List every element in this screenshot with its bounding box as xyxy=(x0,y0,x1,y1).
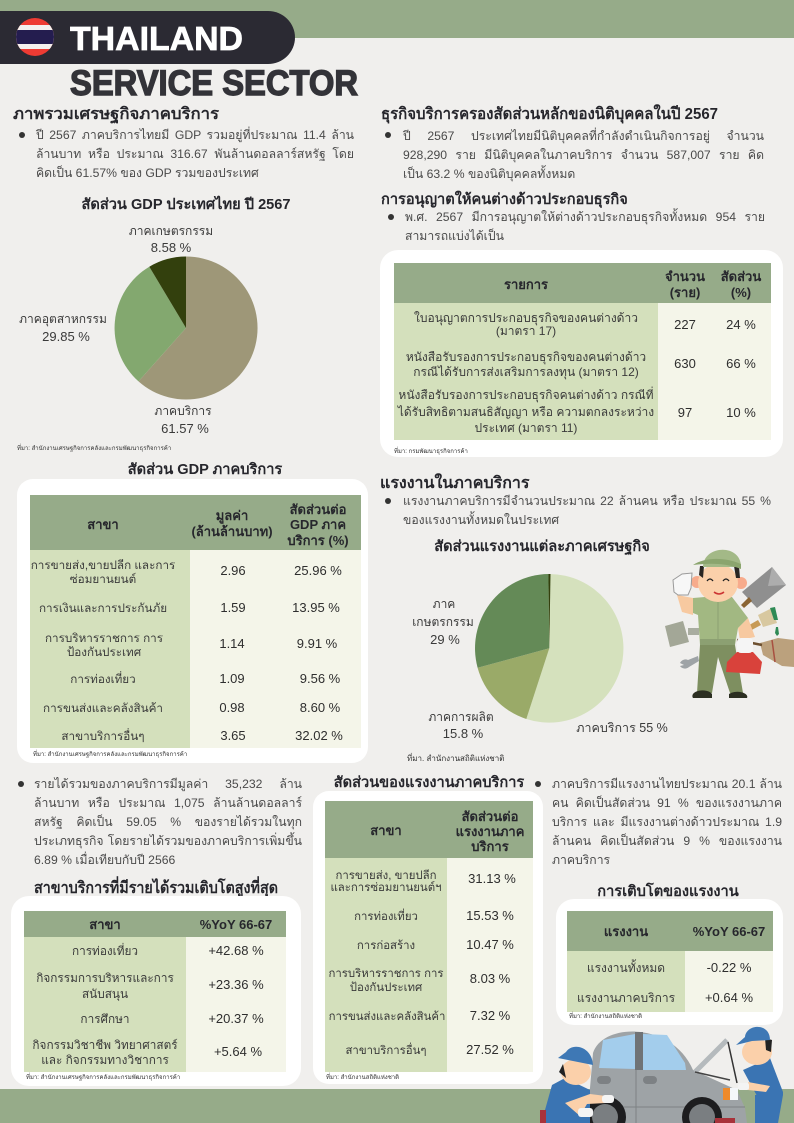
panel: labour share table: การขนส่งและคลังสินค้า xyxy=(329,1010,445,1023)
panel: revenue growth table: สาขา xyxy=(89,917,121,932)
panel: foreign business permits table: 66 % xyxy=(726,356,756,371)
title banner xyxy=(0,11,295,64)
panel: labour share table: สัดส่วนต่อ xyxy=(462,809,518,824)
panel: labour growth table: แรงงานภาคบริการ xyxy=(577,991,676,1005)
panel: GDP services table: 3.65 xyxy=(220,728,246,743)
panel: labour growth table: ที่มา: สำนักงานสถิติแห่งชาติ xyxy=(569,1012,642,1020)
panel: GDP services table: 1.09 xyxy=(219,671,245,686)
panel: revenue growth table: กิจกรรมวิชาชีพ วิทยาศาสตร์ xyxy=(32,1038,178,1052)
panel: revenue growth table: +42.68 % xyxy=(208,943,264,958)
text: labour composition paragraph: คน คิดเป็นสัดส่วน 91 % ของแรงงานภาค xyxy=(552,796,782,810)
panel: foreign business permits table: 97 xyxy=(678,405,692,420)
panel: labour share table: ที่มา: สำนักงานสถิติแห่งชาติ xyxy=(326,1073,399,1081)
panel: labour growth table: แรงงานทั้งหมด xyxy=(587,959,665,975)
panel: revenue growth table: การศึกษา xyxy=(80,1012,130,1026)
source: GDP pie: ที่มา: สำนักงานเศรษฐกิจการคลังและกรมพัฒนาธุรกิจการค้า xyxy=(17,444,171,452)
heading: revenue growth: สาขาบริการที่มีรายได้รวมเติบโตสูงที่สุด xyxy=(34,876,278,899)
panel: revenue growth table: กิจกรรมการบริหารและการ xyxy=(36,971,174,985)
panel: revenue growth table: +23.36 % xyxy=(208,977,264,992)
panel: labour growth table: +0.64 % xyxy=(705,990,753,1005)
panel: foreign business permits table: (มาตรา 17) xyxy=(496,324,556,338)
panel: GDP services table: การขายส่ง,ขายปลีก และการ xyxy=(31,559,175,572)
heading: labour share table: สัดส่วนของแรงงานภาคบริการ xyxy=(334,774,524,791)
panel: GDP services table xyxy=(17,479,368,763)
pie label: services: ภาคบริการ xyxy=(154,404,212,418)
text: foreign permits paragraph: พ.ศ. 2567 มีการอนุญาตให้ต่างด้าวประกอบธุรกิจทั้งหมด 954 ราย xyxy=(405,210,765,224)
pie label: industry xyxy=(19,312,107,344)
text: revenue paragraph: รายได้รวมของภาคบริการมีมูลค่า 35,232 ล้าน xyxy=(34,777,302,791)
panel: foreign business permits table: สัดส่วน xyxy=(721,269,761,284)
panel: GDP services table: การบริหารราชการ การ xyxy=(45,632,163,645)
pie label: services labour: ภาคบริการ 55 % xyxy=(576,721,668,735)
panel: labour share table: 31.13 % xyxy=(468,871,516,886)
panel: foreign business permits table: 630 xyxy=(674,356,696,371)
panel: foreign business permits table: ประเทศ (มาตรา 11) xyxy=(475,421,577,435)
panel: foreign business permits table: ใบอนุญาตการประกอบธุรกิจของคนต่างด้าว xyxy=(414,311,638,326)
heading: labour in services: แรงงานในภาคบริการ xyxy=(380,473,530,492)
panel: GDP services table: 32.02 % xyxy=(295,728,343,743)
panel: foreign business permits table: 24 % xyxy=(726,317,756,332)
text: service GDP paragraph xyxy=(19,126,354,180)
text: juristic persons paragraph: ปี 2567 ประเทศไทยมีนิติบุคคลที่กำลังดำเนินกิจการอยู่ จำนวน xyxy=(403,129,764,143)
panel: GDP services table: 1.14 xyxy=(219,636,245,651)
panel: GDP services table: ซ่อมยานยนต์ xyxy=(70,572,136,586)
pie label: agriculture xyxy=(129,224,213,255)
panel: GDP services table: มูลค่า xyxy=(216,508,248,524)
panel: revenue growth table: +20.37 % xyxy=(208,1011,264,1026)
panel: foreign business permits table: หนังสือรับรองการประกอบธุรกิจคนต่างด้าว กรณีที่ xyxy=(398,386,654,403)
text: service GDP paragraph: ล้านบาท หรือ ประมาณ 316.67 พันล้านดอลลาร์สหรัฐ โดย xyxy=(36,147,354,161)
text: revenue paragraph xyxy=(18,777,302,867)
top green band xyxy=(0,0,794,38)
panel: foreign business permits table: (ราย) xyxy=(670,285,700,300)
bottom green band xyxy=(0,1089,794,1123)
panel: labour share table: 7.32 % xyxy=(470,1008,511,1023)
panel: foreign business permits table: ที่มา: กรมพัฒนาธุรกิจการค้า xyxy=(394,447,468,455)
panel: GDP services table: 0.98 xyxy=(219,700,245,715)
chart title: Thai GDP share: สัดส่วน GDP ประเทศไทย ปี 2567 xyxy=(81,195,291,213)
panel: GDP services table: 13.95 % xyxy=(292,600,340,615)
panel: GDP services table: (ล้านล้านบาท) xyxy=(191,524,273,539)
panel: foreign business permits table: หนังสือรับรองการประกอบธุรกิจของคนต่างด้าว xyxy=(406,350,646,365)
panel: labour growth table xyxy=(556,899,783,1025)
panel: labour growth table: -0.22 % xyxy=(707,960,752,975)
panel: labour growth table: %YoY 66-67 xyxy=(693,924,765,939)
chart title: labour share: สัดส่วนแรงงานแต่ละภาคเศรษฐกิจ xyxy=(434,538,650,556)
text: foreign permits paragraph: สามารถแบ่งได้เป็น xyxy=(405,229,504,243)
panel: foreign business permits table: กรณีได้รับการส่งเสริมการลงทุน (มาตรา 12) xyxy=(413,365,639,380)
panel: revenue growth table: และ กิจกรรมทางวิชาการ xyxy=(41,1053,169,1067)
text: foreign permits paragraph xyxy=(388,208,765,243)
pie label: services xyxy=(154,404,212,436)
text: juristic persons paragraph: 928,290 ราย มีนิติบุคคลในภาคบริการ จำนวน 587,007 ราย คิด xyxy=(403,148,764,162)
panel: GDP services table: 1.59 xyxy=(220,600,246,615)
panel: revenue growth table: สนับสนุน xyxy=(82,987,128,1001)
panel: GDP services table: สาขา xyxy=(87,517,119,532)
text: labour composition paragraph: ภาคบริการ xyxy=(552,853,610,867)
text: labour composition paragraph: ล้านคน คิดเป็นสัดส่วน 9 % ของแรงงาน xyxy=(552,834,782,848)
panel: GDP services table: การขนส่งและคลังสินค้า xyxy=(43,702,163,715)
pie chart: GDP share xyxy=(115,256,258,399)
pie label: agriculture labour: ภาค xyxy=(433,597,455,611)
panel: labour share table: 15.53 % xyxy=(466,908,514,923)
pie label: agriculture: ภาคเกษตรกรรม xyxy=(129,224,213,238)
panel: labour share table: ป้องกันประเทศ xyxy=(350,981,423,994)
text: revenue paragraph: ล้านบาท หรือ ประมาณ 1,075 ล้านล้านดอลลาร์ xyxy=(34,796,302,810)
heading: juristic persons: ธุรกิจบริการครองสัดส่วนหลักของนิติบุคคลในปี 2567 xyxy=(381,104,718,124)
panel: GDP services table: 2.96 xyxy=(220,563,246,578)
pie label: agriculture: 8.58 % xyxy=(151,240,192,255)
panel: labour share table: การขายส่ง, ขายปลีก xyxy=(335,869,437,882)
panel: foreign business permits table: 227 xyxy=(674,317,696,332)
panel: GDP services table: ที่มา: สำนักงานเศรษฐกิจการคลังและกรมพัฒนาธุรกิจการค้า xyxy=(33,750,187,758)
pie label: agriculture labour: 29 % xyxy=(430,632,460,647)
panel: GDP services table: สาขาบริการอื่นๆ xyxy=(61,728,145,743)
heading: service economy overview: ภาพรวมเศรษฐกิจภาคบริการ xyxy=(13,105,219,124)
title: Thailand: THAILAND xyxy=(70,20,243,57)
text: juristic persons paragraph: เป็น 63.2 % ของนิติบุคคลทั้งหมด xyxy=(403,167,575,181)
panel: foreign business permits table xyxy=(380,250,783,457)
pie label: industry: 29.85 % xyxy=(42,329,90,344)
text: service GDP paragraph: คิดเป็น 61.57% ของ GDP รวมของประเทศ xyxy=(36,166,259,180)
panel: revenue growth table: +5.64 % xyxy=(214,1044,262,1059)
panel: revenue growth table xyxy=(11,896,301,1086)
panel: labour share table xyxy=(313,791,543,1084)
text: labour paragraph: ของแรงงานทั้งหมดในประเทศ xyxy=(403,513,559,527)
panel: revenue growth table: ที่มา: สำนักงานเศรษฐกิจการคลังและกรมพัฒนาธุรกิจการค้า xyxy=(26,1073,180,1081)
panel: foreign business permits table: (%) xyxy=(731,285,751,300)
panel: revenue growth table: %YoY 66-67 xyxy=(200,917,272,932)
panel: labour share table: การบริหารราชการ การ xyxy=(328,967,444,980)
panel: GDP services table: บริการ (%) xyxy=(287,533,349,548)
panel: GDP services table: 9.91 % xyxy=(297,636,338,651)
pie label: manufacturing labour: ภาคการผลิต xyxy=(428,710,494,724)
panel: revenue growth table: การท่องเที่ยว xyxy=(72,943,138,958)
icon: mechanics repairing car xyxy=(540,1027,783,1123)
panel: GDP services table: 9.56 % xyxy=(300,671,341,686)
text: revenue paragraph: ประเภทธุรกิจ โดยรายได้รวมของภาคบริการเพิ่มขึ้น xyxy=(34,834,302,848)
heading: foreign business permits: การอนุญาตให้คนต่างด้าวประกอบธุรกิจ xyxy=(381,190,628,208)
text: labour composition paragraph xyxy=(535,777,782,867)
source: labour pie: ที่มา. สำนักงานสถิติแห่งชาติ xyxy=(407,752,504,763)
pie label: manufacturing labour xyxy=(428,710,494,741)
text: revenue paragraph: 6.89 % เมื่อเทียบกับปี 2566 xyxy=(34,853,175,867)
panel: GDP services table: การเงินและการประกันภัย xyxy=(39,602,167,615)
panel: labour share table: และการซ่อมยานยนต์ฯ xyxy=(330,880,442,894)
panel: GDP services table: สัดส่วนต่อ xyxy=(290,502,346,517)
panel: foreign business permits table: จำนวน xyxy=(665,269,705,284)
panel: labour share table: การท่องเที่ยว xyxy=(354,908,418,923)
panel: foreign business permits table: รายการ xyxy=(504,277,548,292)
panel: labour growth table: แรงงาน xyxy=(604,924,648,939)
title: service sector: SERVICE SECTOR xyxy=(70,64,358,103)
panel: labour share table: แรงงานภาค xyxy=(456,824,524,839)
text: labour paragraph: แรงงานภาคบริการมีจำนวนประมาณ 22 ล้านคน หรือ ประมาณ 55 % xyxy=(403,494,771,508)
panel: GDP services table: GDP ภาค xyxy=(290,517,346,532)
pie label: agriculture labour xyxy=(412,597,474,647)
text: labour composition paragraph: ภาคบริการมีแรงงานไทยประมาณ 20.1 ล้าน xyxy=(552,777,782,791)
panel: GDP services table: การท่องเที่ยว xyxy=(70,671,136,686)
text: service GDP paragraph: ปี 2567 ภาคบริการไทยมี GDP รวมอยู่ที่ประมาณ 11.4 ล้าน xyxy=(36,128,354,142)
panel: labour share table: สาขาบริการอื่นๆ xyxy=(345,1042,427,1057)
panel: labour share table: สาขา xyxy=(370,823,402,838)
pie chart: labour share xyxy=(475,574,623,723)
pie label: agriculture labour: เกษตรกรรม xyxy=(412,615,474,629)
heading: GDP services table: สัดส่วน GDP ภาคบริการ xyxy=(128,461,282,478)
text: labour composition paragraph: บริการ และ มีแรงงานต่างด้าวประมาณ 1.9 xyxy=(552,815,782,829)
panel: foreign business permits table: 10 % xyxy=(726,405,756,420)
panel: GDP services table: 25.96 % xyxy=(294,563,342,578)
pie label: services: 61.57 % xyxy=(161,421,209,436)
pie label: manufacturing labour: 15.8 % xyxy=(443,726,484,741)
panel: labour share table: 10.47 % xyxy=(466,937,514,952)
panel: labour share table: 8.03 % xyxy=(470,971,511,986)
text: labour paragraph xyxy=(385,494,771,527)
heading: labour growth: การเติบโตของแรงงาน xyxy=(597,882,739,900)
panel: labour share table: การก่อสร้าง xyxy=(357,939,415,952)
panel: GDP services table: 8.60 % xyxy=(300,700,341,715)
panel: GDP services table: ป้องกันประเทศ xyxy=(67,646,142,659)
pie label: industry: ภาคอุตสาหกรรม xyxy=(19,312,107,327)
text: juristic persons paragraph xyxy=(385,128,764,182)
panel: labour share table: บริการ xyxy=(471,839,509,854)
icon: Thai flag xyxy=(16,18,54,56)
icon: worker with tools xyxy=(665,550,794,698)
panel: foreign business permits table: ได้รับสิทธิตามสนธิสัญญา หรือ ความตกลงระหว่าง xyxy=(397,405,654,419)
text: revenue paragraph: สหรัฐ คิดเป็น 59.05 % ของรายได้รวมในทุก xyxy=(34,815,302,829)
panel: labour share table: 27.52 % xyxy=(466,1042,514,1057)
